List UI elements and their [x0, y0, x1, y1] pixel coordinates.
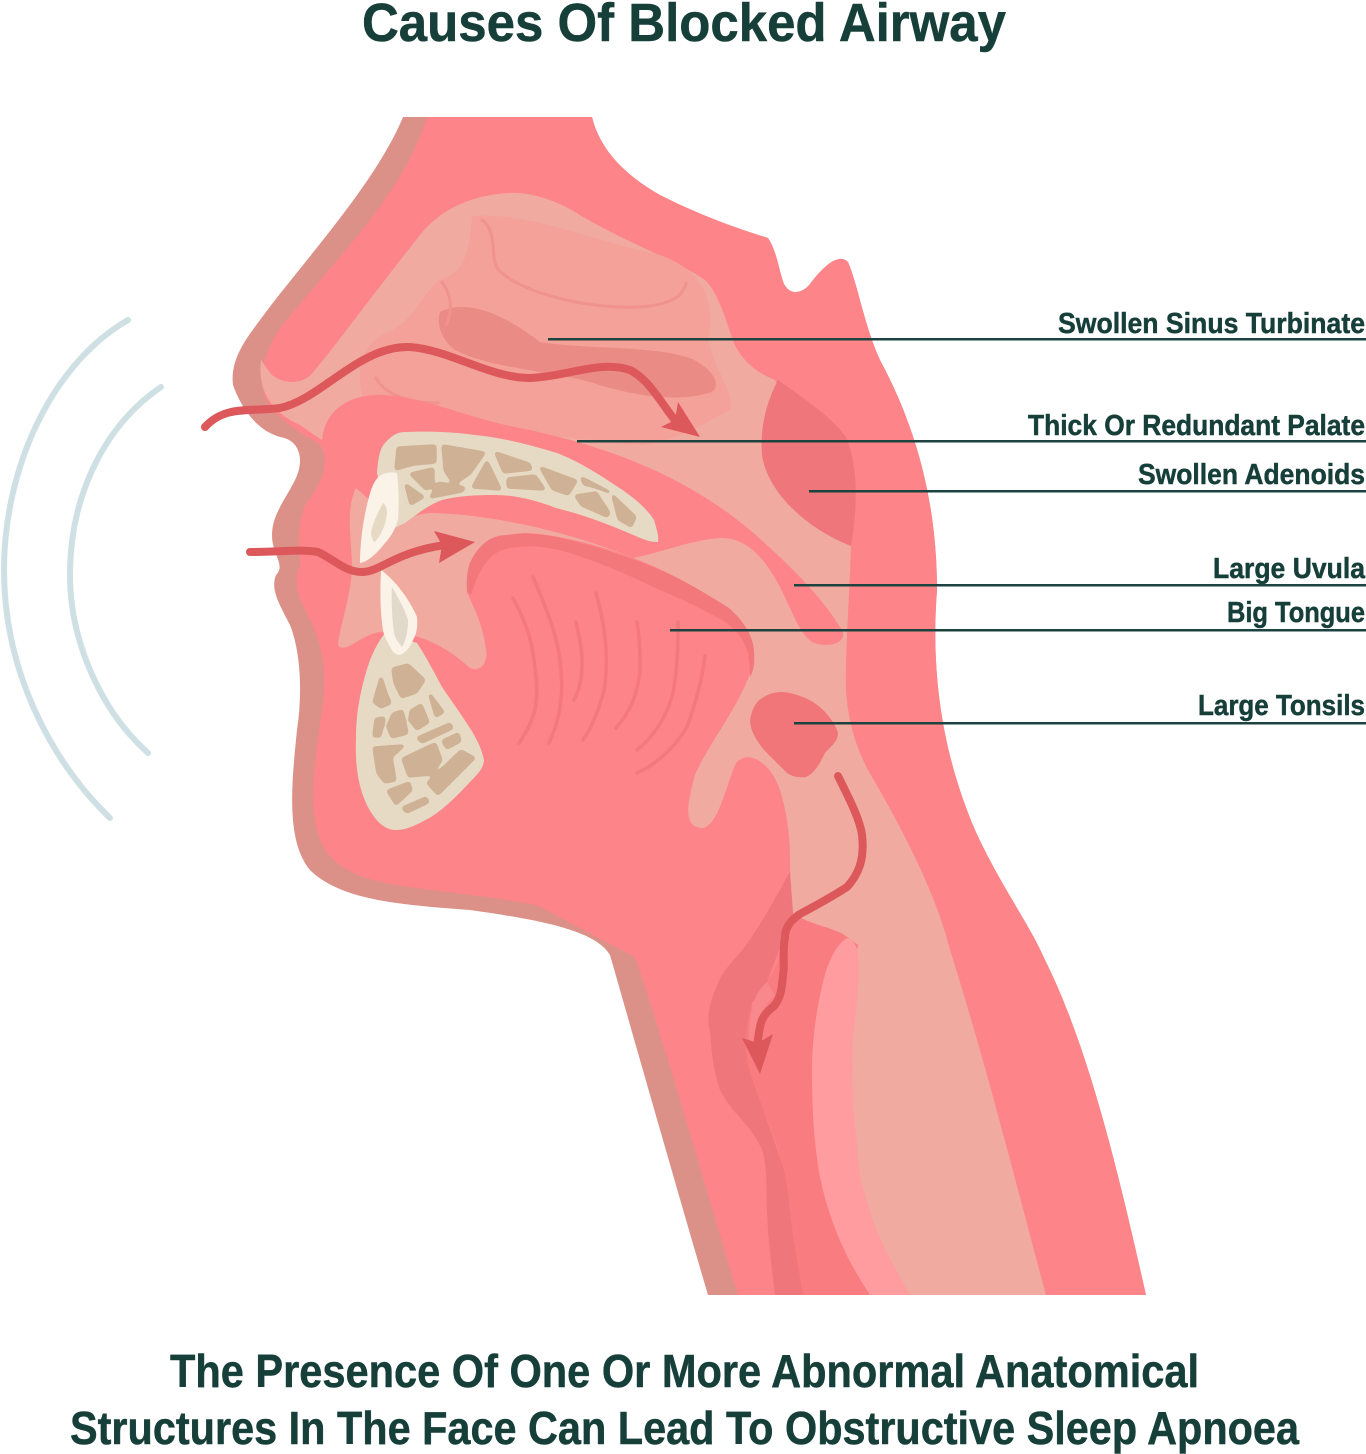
tongue surface band — [467, 534, 754, 677]
jaw bone — [356, 633, 484, 830]
throat lighter fold — [749, 982, 775, 1045]
sound waves — [4, 320, 161, 818]
airflow arrow: through mouth — [250, 531, 475, 572]
upper incisor — [360, 472, 399, 563]
head and neck cross-section — [233, 117, 1146, 1295]
main flesh — [262, 117, 1146, 1295]
soft palate and uvula — [300, 395, 843, 645]
turbinate contour lines — [376, 220, 686, 403]
airway: nasal cavity and pharynx — [260, 193, 1046, 1295]
bottom caption: The Presence Of One Or More Abnormal Anatomical — [170, 1345, 1199, 1397]
inner nasal tissue — [360, 216, 731, 445]
palate bone — [377, 432, 658, 542]
tongue body — [467, 533, 754, 790]
lower incisor — [380, 570, 417, 655]
swollen turbinate — [439, 307, 716, 397]
large tonsil — [750, 692, 838, 777]
oral cavity — [338, 488, 640, 669]
skin outline shadow — [233, 117, 1146, 1295]
jaw flesh and epiglottis — [340, 590, 790, 1040]
bottom caption — [70, 1345, 1299, 1454]
trachea wall highlight — [812, 938, 910, 1295]
airflow arrow: through nose — [205, 347, 700, 437]
airflow arrow: down the throat — [742, 776, 863, 1074]
esophagus — [746, 913, 872, 1295]
throat folds: dark band — [708, 871, 805, 1295]
swollen adenoids — [762, 380, 856, 546]
tongue muscle lines — [513, 577, 705, 773]
